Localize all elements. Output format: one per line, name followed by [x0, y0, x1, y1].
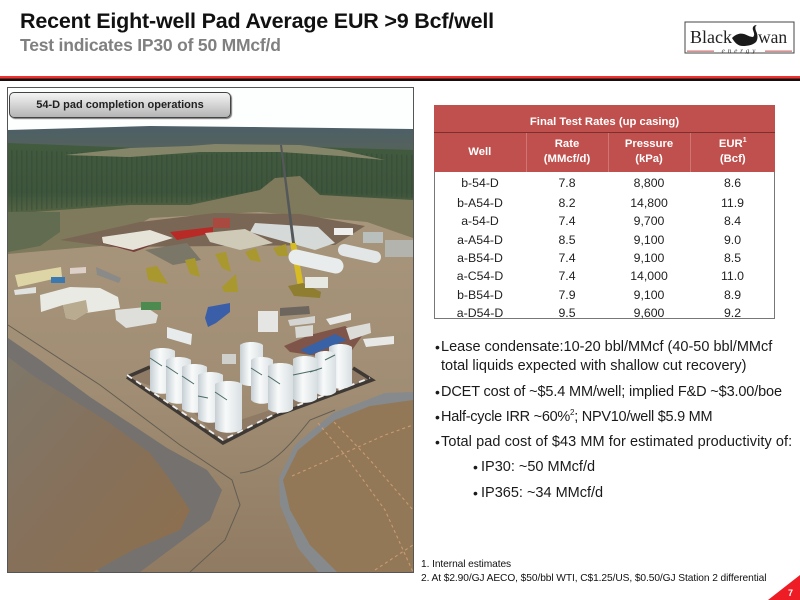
- table: final test rates: a-54-D: [461, 214, 499, 228]
- table: final test rates: 7.9: [558, 288, 576, 302]
- logo: Black Swan energy: wan: [758, 27, 787, 47]
- sub-bullet: IP365: IP365: ~34 MMcf/d: [481, 485, 603, 501]
- table: final test rates: 14,800: [630, 196, 668, 210]
- logo: Black Swan energy: [684, 22, 794, 54]
- far hills: [8, 126, 413, 152]
- text: •: [435, 339, 440, 355]
- table: final test rates: 7.4: [558, 214, 576, 228]
- text: •: [435, 384, 440, 400]
- page number corner: [768, 575, 800, 600]
- table: final test rates: 7.8: [558, 176, 576, 190]
- subtitle: Test indicates IP30 of 50 MMcf/d: [20, 35, 281, 55]
- table: final test rates: 9,100: [634, 288, 664, 302]
- table: final test rates: (Bcf): [720, 153, 746, 165]
- logo: Black Swan energy: Black: [690, 27, 732, 47]
- table: final test rates: 7.4: [558, 269, 576, 283]
- table: final test rates: Rate: [555, 138, 579, 150]
- table: final test rates: 9,100: [634, 251, 664, 265]
- frac equipment rows: [102, 218, 413, 265]
- bullet: DCET cost: DCET cost of ~$5.4 MM/well; implied F&D ~$3.00/boe: [441, 384, 782, 400]
- bullet: lease condensate: Lease condensate:10-20 bbl/MMcf (40-50 bbl/MMcf: [441, 339, 772, 355]
- right pond with liner: [279, 392, 413, 572]
- scrub ground: [8, 170, 413, 270]
- table: final test rates: [434, 105, 775, 319]
- bullet: lease condensate: total liquids expected with shallow cut recovery): [441, 358, 746, 374]
- table: final test rates: 7.4: [558, 251, 576, 265]
- bullet: lease condensate: [435, 339, 772, 374]
- title: Recent Eight-well Pad Average EUR >9 Bcf/well: [20, 9, 494, 33]
- table: final test rates: 9,100: [634, 232, 664, 246]
- table: final test rates: 8.2: [558, 196, 576, 210]
- horizontal tanks: [296, 250, 375, 266]
- photo caption badge: [9, 92, 231, 118]
- table: final test rates: 11.9: [721, 196, 744, 210]
- table: final test rates: b-54-D: [461, 176, 499, 190]
- table: final test rates: EUR1: [719, 137, 747, 150]
- footnotes: 2. At $2.90/GJ AECO, $50/bbl WTI, C$1.25/US, $0.50/GJ Station 2 differential: [421, 572, 766, 584]
- table: final test rates: 8.4: [724, 214, 741, 228]
- hoses: [8, 325, 335, 572]
- table: final test rates: (kPa): [635, 153, 663, 165]
- table: final test rates: (MMcf/d): [544, 153, 590, 165]
- sub-bullet: IP30: IP30: ~50 MMcf/d: [481, 459, 595, 475]
- text: •: [473, 459, 478, 475]
- photo: completion operations: [7, 87, 414, 573]
- tank containment berm: [127, 367, 372, 443]
- table: final test rates: 8.5: [724, 251, 741, 265]
- table: final test rates: 9.0: [724, 232, 741, 246]
- table: final test rates: a-C54-D: [457, 269, 503, 283]
- table: final test rates: 8.6: [724, 176, 741, 190]
- sparse trees at left: [8, 212, 60, 252]
- table: final test rates: 14,000: [630, 269, 668, 283]
- text: •: [435, 409, 440, 425]
- table: final test rates: Final Test Rates (up casing): [530, 116, 679, 128]
- storage tanks: [150, 342, 352, 433]
- table: final test rates: b-A54-D: [457, 196, 503, 210]
- yellow excavators: [146, 244, 288, 292]
- table: final test rates: Pressure: [625, 138, 673, 150]
- forest: [8, 143, 413, 214]
- page number corner: 7: [788, 588, 793, 598]
- photo caption badge: 54-D pad completion operations: [36, 99, 204, 111]
- table: final test rates: 11.0: [721, 269, 744, 283]
- table: final test rates: a-B54-D: [457, 251, 503, 265]
- bullet: total pad cost: Total pad cost of $43 MM for estimated productivity of:: [441, 434, 792, 450]
- text: •: [435, 434, 440, 450]
- table: final test rates: 8.9: [724, 288, 741, 302]
- table: final test rates: 8.5: [558, 232, 576, 246]
- site trailers and trucks: [14, 267, 394, 364]
- table: final test rates: 8,800: [634, 176, 664, 190]
- bullet: half-cycle IRR: Half-cycle IRR ~60%2; NPV10/well $5.9 MM: [441, 408, 712, 425]
- pad ground: [8, 212, 413, 572]
- header rule: [0, 76, 800, 81]
- table: final test rates: Well: [468, 146, 491, 158]
- table: final test rates: a-A54-D: [457, 232, 503, 246]
- footnotes: [421, 559, 766, 584]
- cleared land strip: [65, 144, 385, 160]
- left pond with liner: [8, 338, 222, 572]
- table: final test rates: 9,700: [634, 214, 664, 228]
- sky: [8, 88, 413, 130]
- footnotes: 1. Internal estimates: [421, 559, 511, 570]
- text: •: [473, 485, 478, 501]
- table: final test rates: b-B54-D: [457, 288, 503, 302]
- crane: [280, 145, 328, 298]
